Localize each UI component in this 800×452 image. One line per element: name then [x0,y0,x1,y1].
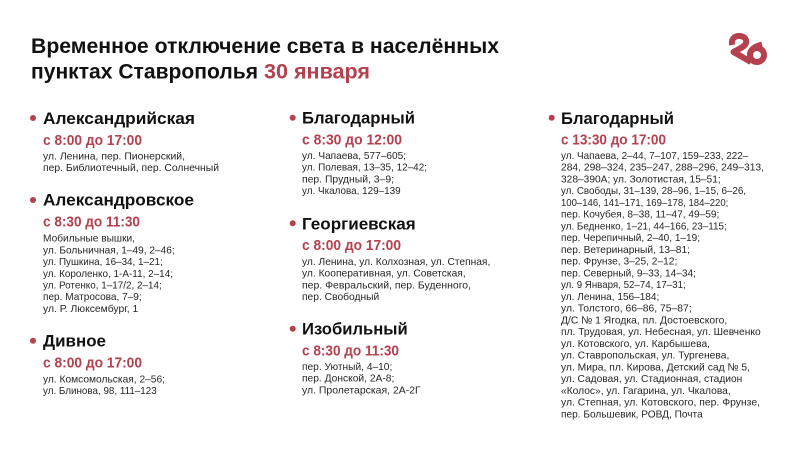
block: Благодарный 8:30–12:00: Благодарный [302,108,415,128]
block: Александровское: ул. Р. Люксембург, 1 [43,303,138,315]
block: Александровское: пер. Матросова, 7–9; [43,291,142,303]
block: Благодарный 13:30–17:00 [549,109,764,420]
block: Благодарный 13:30–17:00: ул. Свободы, 31–139, 28–96, 1–15, 6–26, [561,185,746,197]
block: Изобильный: ул. Пролетарская, 2А-2Г [302,384,421,396]
block: Благодарный 13:30–17:00: ул. Ленина, 156–184; [561,291,659,303]
block: Благодарный 13:30–17:00: 328–390А; ул. Золотистая, 15–51; [561,174,721,186]
block: Благодарный 8:30–12:00: ул. Полевая, 13–35, 12–42; [302,162,427,174]
block: Благодарный 13:30–17:00: ул. 9 Января, 52–74, 17–31; [561,279,686,291]
block: Благодарный 13:30–17:00: Д/С № 1 Ягодка, пл. Достоевского, [561,314,727,326]
block: Георгиевская: ул. Ленина, ул. Колхозная, ул. Степная, [302,256,490,268]
block: Дивное: с 8:00 до 17:00 [43,355,142,371]
block: Изобильный: Изобильный [302,319,408,338]
block: Благодарный 13:30–17:00: пер. Ветеринарный, 13–81; [561,244,690,256]
block: Благодарный 8:30–12:00: ул. Чапаева, 577–605; [302,150,406,162]
block: Благодарный 8:30–12:00: пер. Прудный, 3–9; [302,173,394,185]
block: Георгиевская [290,214,490,303]
block: Благодарный 13:30–17:00: ул. Ставропольская, ул. Тургенева, [561,350,729,362]
title: 30 января [264,60,370,84]
block: Георгиевская: пер. Свободный [302,291,379,303]
block: Благодарный 8:30–12:00: с 8:30 до 12:00 [302,132,402,148]
block: Благодарный 13:30–17:00: пер. Большевик, РОВД, Почта [561,408,703,420]
block: Дивное: ул. Блинова, 98, 111–123 [43,385,157,397]
block: Благодарный 13:30–17:00: пер. Черепичный, 2–40, 1–19; [561,232,700,244]
block: Георгиевская: с 8:00 до 17:00 [302,238,401,254]
block: Благодарный 13:30–17:00: ул. Котовского, ул. Карбышева, [561,338,710,350]
block: Благодарный 13:30–17:00: пер. Северный, 9–33, 14–34; [561,267,696,279]
block: Благодарный 13:30–17:00: пл. Трудовая, ул. Небесная, ул. Шевченко [561,326,761,338]
block: Благодарный 13:30–17:00: 100–146, 141–171, 169–178, 184–220; [561,197,728,209]
block: Благодарный 13:30–17:00: ул. Мира, пл. Кирова, Детский сад № 5, [561,361,750,373]
block: Дивное: ул. Комсомольская, 2–56; [43,373,165,385]
block: Изобильный: пер. Уютный, 4–10; [302,361,392,373]
block: Александрийская: Александрийская [43,109,195,128]
block: Александрийская [30,109,219,174]
panel: column 3 [549,109,764,420]
block: Благодарный 13:30–17:00: ул. Бедненко, 1–21, 44–166, 23–115; [561,220,727,232]
block: Александровское: ул. Пушкина, 16–34, 1–21; [43,256,163,268]
block: Благодарный 13:30–17:00: с 13:30 до 17:00 [561,132,666,148]
block: Благодарный 13:30–17:00: пер. Кочубея, 8–38, 11–47, 49–59; [561,209,719,221]
block: Георгиевская: ул. Кооперативная, ул. Советская, [302,268,466,280]
block: Благодарный 13:30–17:00: ул. Чапаева, 2–44, 7–107, 159–233, 222– [561,150,748,162]
block: Благодарный 13:30–17:00: ул. Садовая, ул. Стадионная, стадион [561,373,742,385]
block: Георгиевская: Георгиевская [302,214,416,233]
block: Благодарный 13:30–17:00: 284, 298–324, 235–247, 288–296, 249–313, [561,162,764,174]
block: Дивное: Дивное [43,332,106,351]
block: Благодарный 13:30–17:00: Благодарный [561,109,674,128]
panel: column 1 [30,109,219,397]
title: пунктах Ставрополья [31,60,258,84]
title [31,34,499,84]
block: Благодарный 13:30–17:00: «Колос», ул. Гагарина, ул. Чкалова, [561,385,731,397]
block: Александровское: ул. Больничная, 1–49, 2–46; [43,244,175,256]
block: Благодарный 8:30–12:00: ул. Чкалова, 129–139 [302,185,401,197]
block: Александровское: Александровское [43,191,194,210]
title: Временное отключение света в населённых [31,34,499,58]
block: Изобильный [290,319,421,396]
block: Благодарный 13:30–17:00: ул. Степная, ул. Котовского, пер. Фрунзе, [561,396,760,408]
panel: column 2 [290,108,490,396]
block: Георгиевская: пер. Февральский, пер. Буденного, [302,279,471,291]
block: Александровское [30,191,194,315]
block: Дивное [30,332,165,397]
block: Александровское: ул. Короленко, 1-А-11, 2–14; [43,268,173,280]
icon: logo 26 [732,36,764,62]
block: Александровское: Мобильные вышки, [43,233,135,245]
block: Благодарный 13:30–17:00: пер. Фрунзе, 3–25, 2–12; [561,256,677,268]
block: Александрийская: с 8:00 до 17:00 [43,133,142,149]
block: Александровское: с 8:30 до 11:30 [43,215,140,231]
block: Александровское: ул. Ротенко, 1–17/2, 2–14; [43,280,162,292]
block: Изобильный: пер. Донской, 2А-8; [302,373,394,385]
block: Изобильный: с 8:30 до 11:30 [302,344,399,360]
block: Александрийская: ул. Ленина, пер. Пионерский, [43,150,185,162]
block: Благодарный 8:30–12:00 [290,108,427,197]
block: Благодарный 13:30–17:00: ул. Толстого, 66–86, 75–87; [561,303,692,315]
block: Александрийская: пер. Библиотечный, пер. Солнечный [43,162,219,174]
